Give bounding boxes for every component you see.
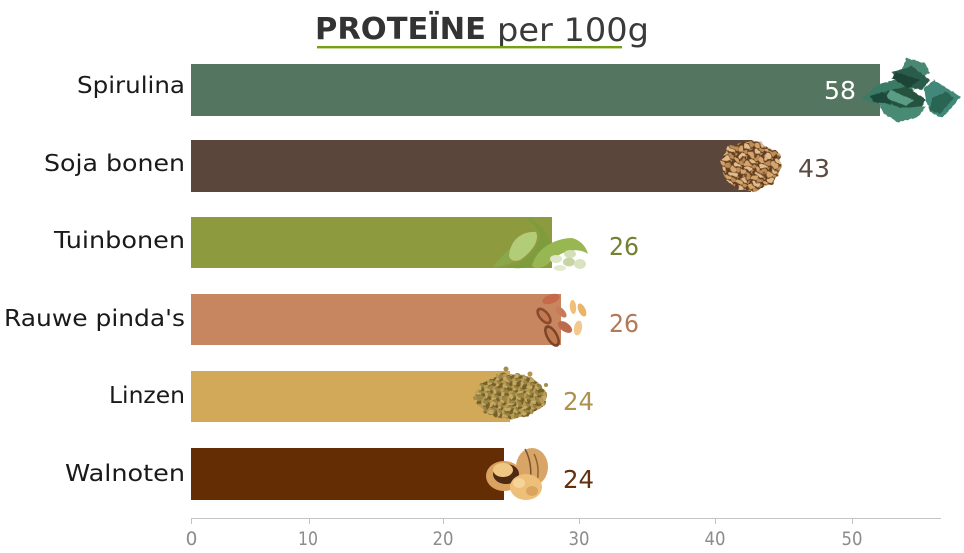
icon: peanuts xyxy=(533,292,588,349)
row: Spirulina xyxy=(77,58,961,122)
row: Tuinbonen: Tuinbonen xyxy=(53,228,185,254)
icon: spirulina flakes xyxy=(862,58,961,122)
row: Walnoten: 24 xyxy=(563,465,594,494)
title: per 100g xyxy=(497,11,649,49)
icon: lentils xyxy=(473,366,548,419)
row: Spirulina: 58 xyxy=(824,76,856,105)
axis: 50 xyxy=(842,529,862,550)
axis xyxy=(186,518,941,550)
axis: 30 xyxy=(568,529,590,550)
title xyxy=(315,11,649,49)
icon: soybeans xyxy=(721,141,781,191)
axis: 40 xyxy=(704,529,726,550)
row: Soja bonen: Soja bonen xyxy=(44,151,185,177)
row: Soja bonen: 43 xyxy=(798,154,830,183)
row: Linzen: Linzen xyxy=(109,383,185,409)
row: Walnoten: Walnoten xyxy=(65,461,185,487)
row: Rauwe pinda's: Rauwe pinda's xyxy=(4,306,185,332)
row: Tuinbonen xyxy=(53,217,639,271)
row: Spirulina: Spirulina xyxy=(77,73,185,99)
axis: 0 xyxy=(186,529,197,550)
row: Linzen: 24 xyxy=(563,387,594,416)
row: Soja bonen xyxy=(44,140,830,192)
row: Rauwe pinda's: 26 xyxy=(609,309,639,338)
row: Rauwe pinda's xyxy=(4,292,639,349)
row: Linzen xyxy=(109,366,594,422)
title: PROTEÏNE xyxy=(315,11,486,47)
icon: broad beans xyxy=(493,218,588,271)
axis: 10 xyxy=(298,529,318,550)
row: Walnoten xyxy=(65,448,594,500)
row: Tuinbonen: 26 xyxy=(609,232,639,261)
axis: 20 xyxy=(432,529,454,550)
icon: walnuts xyxy=(486,448,548,500)
